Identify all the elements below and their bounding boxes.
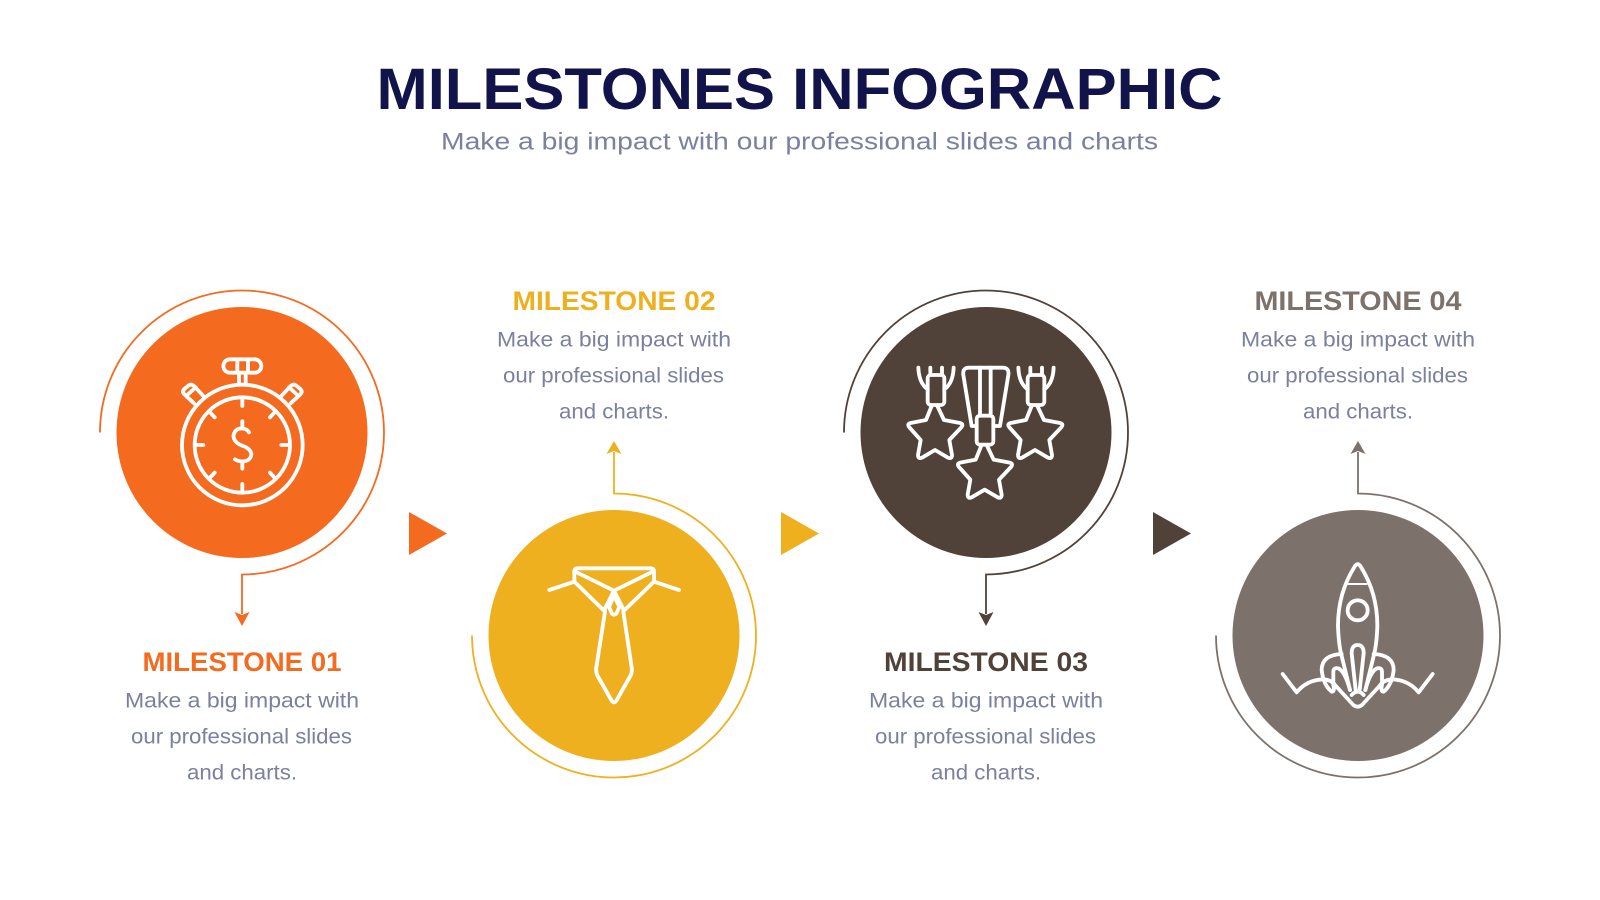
milestone 01 description xyxy=(125,690,359,785)
milestone 02 description: our professional slides xyxy=(503,365,724,388)
icon: star medals xyxy=(908,368,1062,498)
milestone 04 heading: MILESTONE 04 xyxy=(1254,286,1462,316)
icon: stopwatch with dollar sign xyxy=(182,359,303,505)
milestone 01 description: Make a big impact with xyxy=(125,690,359,713)
brown circle xyxy=(860,307,1112,558)
milestone 04 description xyxy=(1241,329,1475,424)
arrow: brown triangle xyxy=(1153,512,1191,555)
milestone 01 description: and charts. xyxy=(187,762,297,785)
milestone 02 heading: MILESTONE 02 xyxy=(512,286,716,316)
grey circle xyxy=(1232,510,1484,761)
orange ring with down arrow xyxy=(100,290,384,626)
yellow circle xyxy=(488,510,740,761)
milestone 04 description: Make a big impact with xyxy=(1241,329,1475,352)
subtitle: Make a big impact with our professional slides and charts xyxy=(441,128,1158,156)
brown ring with down arrow xyxy=(844,290,1128,626)
icon: rocket xyxy=(1283,564,1433,707)
icon: necktie xyxy=(549,568,679,702)
arrow: yellow triangle xyxy=(781,512,819,555)
title: MILESTONES INFOGRAPHIC xyxy=(376,57,1222,122)
milestone 03 description xyxy=(869,690,1103,785)
milestone 01 description: our professional slides xyxy=(131,726,352,749)
milestone 01 heading: MILESTONE 01 xyxy=(142,647,342,677)
panel: milestone 02 xyxy=(472,286,756,777)
milestone 04 description: our professional slides xyxy=(1247,365,1468,388)
centre medal xyxy=(958,368,1012,498)
milestone 02 description: and charts. xyxy=(559,401,669,424)
left medal xyxy=(908,368,962,458)
panel: milestone 03 xyxy=(844,290,1128,785)
milestone 03 description: and charts. xyxy=(931,762,1041,785)
milestone 03 description: Make a big impact with xyxy=(869,690,1103,713)
grey ring with up arrow xyxy=(1216,441,1500,777)
milestone 02 description xyxy=(497,329,731,424)
milestone 03 description: our professional slides xyxy=(875,726,1096,749)
panel: milestone 01 xyxy=(100,290,384,785)
milestone 03 heading: MILESTONE 03 xyxy=(884,647,1088,677)
milestone 02 description: Make a big impact with xyxy=(497,329,731,352)
right medal xyxy=(1008,368,1062,458)
orange circle xyxy=(116,307,368,558)
panel: milestone 04 xyxy=(1216,286,1500,777)
milestone 04 description: and charts. xyxy=(1303,401,1413,424)
yellow ring with up arrow xyxy=(472,441,756,777)
arrow: orange triangle xyxy=(409,512,447,555)
